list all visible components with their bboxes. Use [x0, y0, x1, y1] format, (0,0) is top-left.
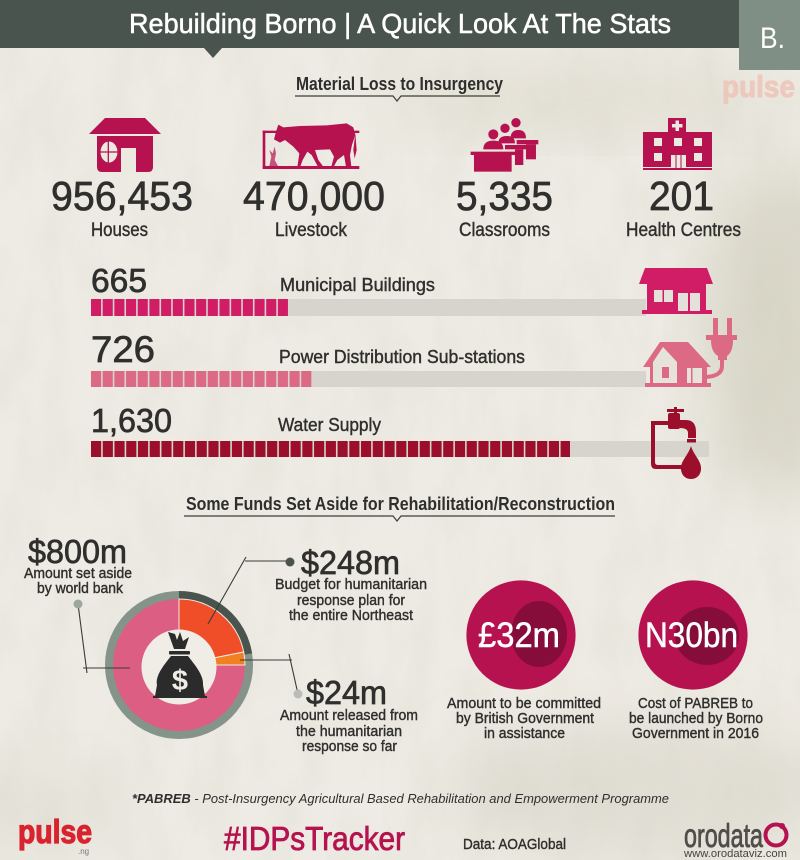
segment: world bank: [113, 599, 245, 731]
label: houses: Houses: [91, 220, 148, 241]
description: Government in 2016: [632, 725, 759, 742]
icon: municipal building: [639, 268, 713, 314]
description: be launched by Borno: [629, 710, 763, 727]
center hole: [142, 630, 216, 704]
segment: $248m: [179, 599, 244, 665]
icon: money bag: $: [172, 665, 188, 697]
marker: [74, 600, 82, 608]
value: houses: 956,453: [51, 173, 193, 219]
description: [629, 695, 763, 742]
callout: $24m: [240, 654, 418, 755]
segment: $24m: [179, 652, 245, 665]
bar: track: [91, 441, 709, 457]
bar: track: [91, 299, 646, 316]
label: power distribution sub-stations: Power Distribution Sub-stations: [279, 347, 525, 367]
header banner: [0, 0, 739, 58]
heading: material loss: Material Loss to Insurgency: [296, 74, 503, 94]
icon: classroom: [471, 118, 538, 172]
value: 665: 665: [91, 262, 147, 299]
badge: B.: [739, 0, 800, 70]
label: health centres: Health Centres: [626, 220, 741, 241]
description: [275, 576, 427, 624]
description: Cost of PABREB to: [638, 695, 753, 712]
value: $248m: [301, 544, 400, 581]
data source: Data: AOAGlobal: [463, 836, 566, 853]
description: Amount set aside: [24, 565, 132, 582]
value: 726: 726: [91, 329, 155, 370]
logo: pulse: pulse: [18, 813, 92, 850]
stat: livestock: [243, 123, 385, 241]
stat: houses: [51, 118, 193, 241]
progress row: water supply: [91, 402, 709, 479]
heading: funds: [184, 494, 615, 521]
description: [447, 695, 601, 742]
description: [24, 565, 132, 597]
icon: house: [89, 118, 161, 172]
bar: filled segments: [91, 371, 312, 387]
progress row: municipal buildings: [91, 262, 713, 316]
callout: $800m: [24, 533, 132, 673]
value: N30bn: [645, 616, 738, 655]
hashtag: #IDPsTracker: [224, 820, 405, 857]
footnote: *PABREB - Post-Insurgency Agricultural Based Rehabilitation and Empowerment Programme: [132, 792, 669, 806]
value: $800m: [28, 533, 127, 570]
value: 1,630: 1,630: [91, 402, 172, 439]
badge: B.: B.: [760, 22, 785, 55]
ring: dark arc for $248m: [179, 591, 252, 665]
leader line: [240, 654, 298, 694]
leader line: [78, 604, 130, 673]
label: classrooms: Classrooms: [459, 220, 550, 241]
description: Amount released from: [280, 707, 418, 724]
title: Rebuilding Borno | A Quick Look At The Stats: [129, 8, 671, 39]
bar: filled segments: [91, 299, 288, 316]
icon: money bag: [153, 632, 207, 698]
logo: orodata: www.orodataviz.com: [683, 848, 787, 860]
leader line: [208, 557, 290, 624]
callout: $248m: [208, 544, 427, 624]
value: £32m: [478, 616, 560, 655]
value: health centres: 201: [649, 173, 714, 219]
description: by British Government: [456, 710, 595, 727]
bar: filled segments: [91, 441, 570, 457]
description: Budget for humanitarian: [275, 576, 427, 593]
label: municipal buildings: Municipal Buildings: [280, 275, 435, 295]
value: classrooms: 5,335: [456, 173, 553, 219]
marker: [294, 690, 302, 698]
icon: house with plug: [643, 318, 737, 387]
description: Amount to be committed: [447, 695, 601, 712]
value: $24m: [306, 674, 387, 711]
description: by world bank: [37, 580, 123, 597]
heading: funds: Some Funds Set Aside for Rehabilitation/Reconstruction: [186, 494, 615, 514]
description: [280, 707, 418, 755]
description: the humanitarian: [296, 723, 402, 740]
description: the entire Northeast: [289, 607, 414, 624]
label: livestock: Livestock: [275, 220, 347, 241]
icon: hospital: [643, 118, 712, 170]
stat: health centres: [626, 118, 741, 241]
progress row: power distribution: [91, 318, 737, 387]
description: response plan for: [297, 592, 405, 609]
marker: [286, 558, 294, 566]
description: response so far: [302, 738, 397, 755]
value: livestock: 470,000: [243, 173, 385, 219]
stat circle: £32m: [447, 580, 601, 742]
label: water supply: Water Supply: [278, 415, 381, 435]
icon: tap and drop: [651, 407, 701, 479]
stat circle: N30bn: [629, 580, 763, 742]
logo: pulse: .ng: [78, 847, 89, 856]
donut chart: [105, 591, 253, 739]
ring: outer grey: [105, 591, 253, 739]
icon: cow: [263, 123, 359, 169]
bar: track: [91, 371, 646, 387]
stat: classrooms: [456, 118, 553, 241]
description: in assistance: [484, 725, 565, 742]
heading: material loss: [295, 74, 503, 101]
logo: orodata: orodata: [684, 817, 763, 854]
